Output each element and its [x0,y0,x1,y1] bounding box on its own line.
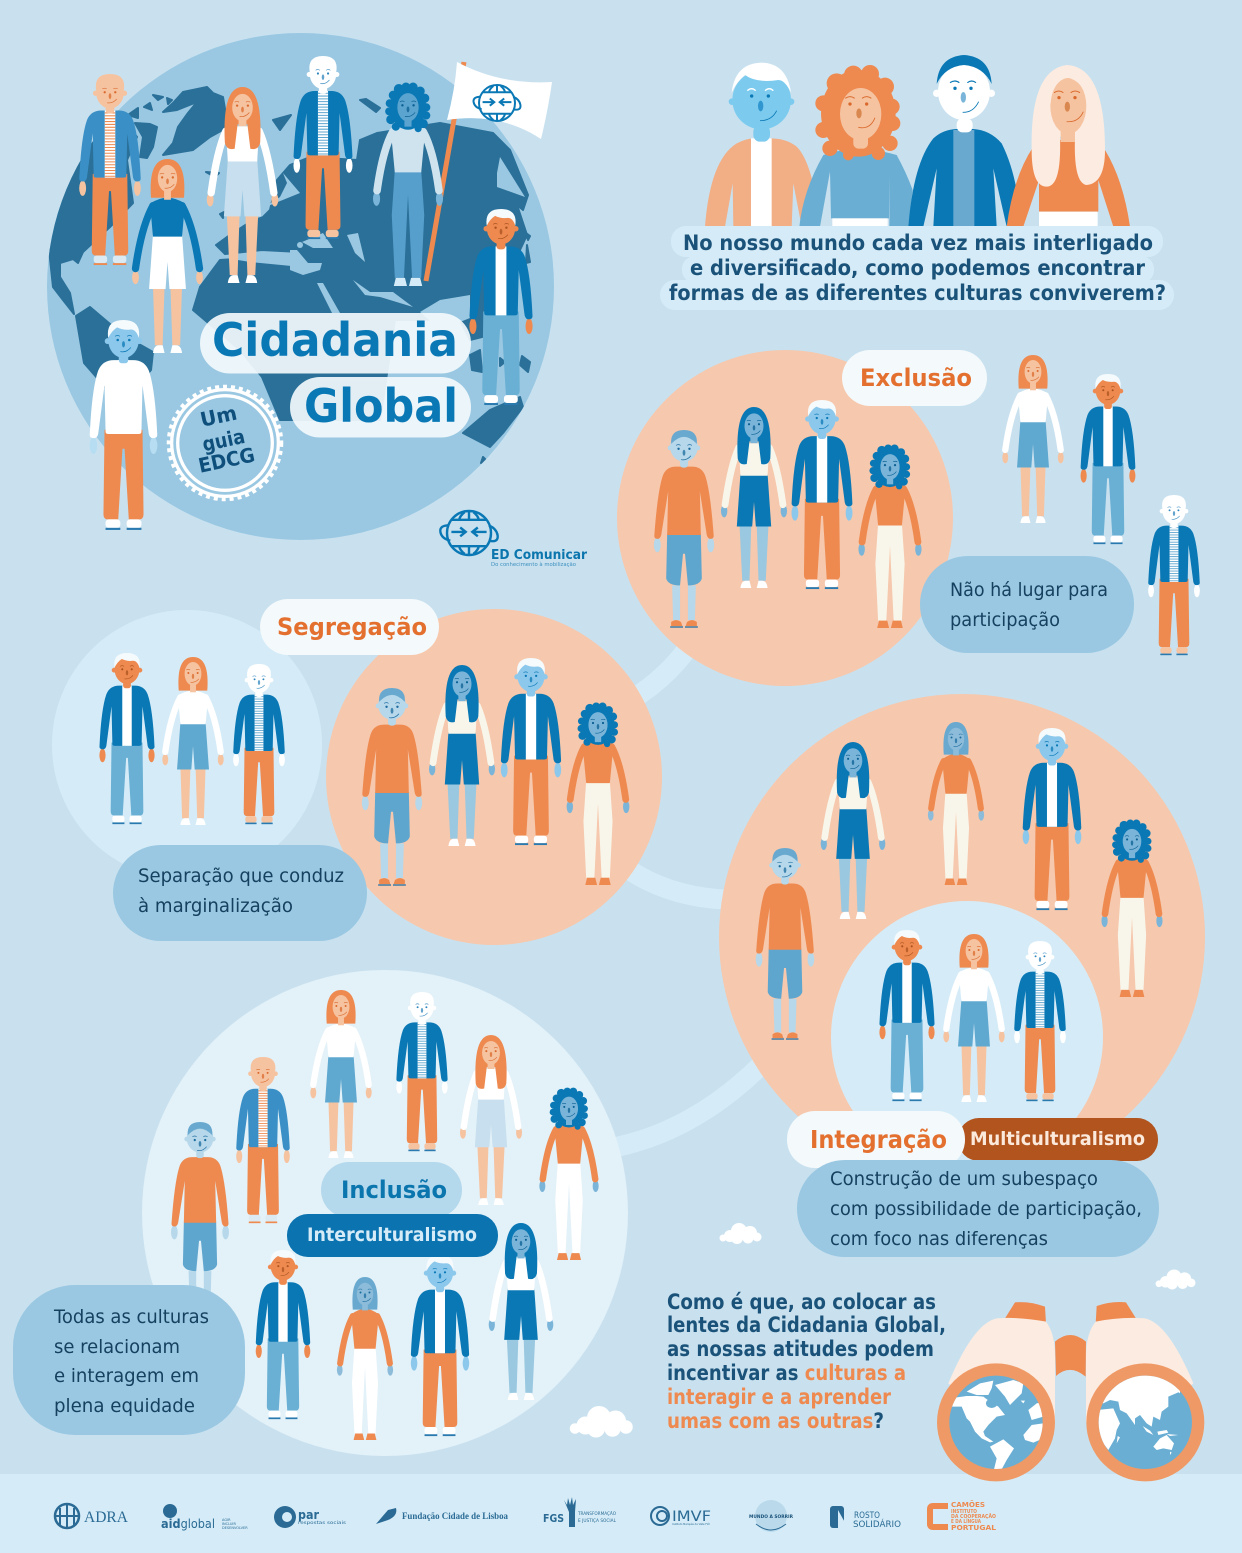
logo: FGS [543,1497,617,1527]
question text [660,226,1174,310]
label: Interculturalismo: Interculturalismo [307,1224,477,1246]
heading: Integração [787,1111,965,1168]
logo: FGS: FGS [543,1512,564,1525]
logo: Fundação Cidade de Lisboa: Fundação Cidade de Lisboa [402,1512,508,1522]
logo: aidglobal: DESENVOLVER [222,1526,248,1530]
panel: Segregação [52,599,662,945]
title: Global: Global [304,379,458,433]
badge: Um guia EDCG: EDCG [196,442,257,478]
closing question text: interagir e a aprender [667,1385,892,1409]
heading: Integração: Integração [810,1125,947,1154]
figure: bald man in blue jacket [396,992,448,1151]
heading: Inclusão [321,1162,462,1218]
flag [426,62,552,281]
figure: woman in small circle [162,657,224,825]
figure: woman in wide trousers [337,1277,393,1440]
figure: man at right [469,209,533,405]
figure: man [501,658,561,845]
logo: ED Comunicar: ED Comunicar [491,548,588,563]
logo: IMVF [651,1507,711,1526]
label: Multiculturalismo [958,1118,1158,1161]
badge: Um guia EDCG: Um [198,401,239,432]
figure: long-haired woman [821,742,885,919]
hero globe with people and title [47,33,554,540]
closing question text: umas com as outras? [667,1409,884,1433]
label: Multiculturalismo: Multiculturalismo [970,1128,1145,1150]
callout: Todas as culturas: Todas as culturas [53,1306,209,1328]
heading: Segregação [260,599,439,655]
logo: Camões: INSTITUTO [951,1509,977,1515]
logo: Camões [930,1500,997,1532]
logo: Fundação Cidade de Lisboa [376,1508,508,1524]
logo: FGS: TRANSFORMAÇÃO [577,1511,616,1516]
figure: man in subspace [879,930,935,1101]
logo: aidglobal: AGIR [222,1518,231,1522]
question text: No nosso mundo cada vez mais interligado [683,231,1153,256]
callout: Todas as culturas: e interagem em [54,1365,199,1387]
figure: man in small circle [99,653,155,824]
figure: man in white sweater [90,320,157,530]
figure: woman with bob [132,159,203,353]
figure: long-haired woman in blue shorts [489,1223,553,1400]
closing question text: incentivar as culturas a [667,1361,906,1385]
figure: bald man in small circle [233,664,285,824]
logo: par: par [298,1508,319,1522]
closing question text: lentes da Cidadania Global, [667,1313,946,1337]
illustration: four people busts [705,55,1130,227]
logo: IMVF: IMVF [672,1509,711,1525]
panel: Exclusão [617,350,1200,686]
question text: formas de as diferentes culturas conviverem? [669,281,1166,306]
logo: Rosto Solidário: ROSTO [854,1511,880,1521]
figure: bald man in blue jacket [293,56,353,239]
figure: woman in wide trousers [928,722,984,885]
label: Interculturalismo [287,1214,498,1257]
figure: woman with long hair [207,87,278,283]
figure: boy [362,688,422,886]
figure: man outside circle [1081,374,1135,544]
footer logos [55,1497,997,1532]
figure: boy [654,430,714,628]
title: Cidadania: Cidadania [212,313,458,367]
logo: ADRA [55,1504,128,1528]
figure: long-haired woman [429,665,495,846]
closing question text [667,1290,946,1433]
figure: woman with bob [310,990,372,1158]
callout: Não há lugar para participação: participação [950,609,1060,631]
figure: long-haired woman [721,407,787,588]
logo: IMVF: Instituto Marquês de Valle Flôr [672,1522,711,1526]
callout: Construção de um subespaço [797,1160,1159,1257]
closing question text: Como é que, ao colocar as [667,1290,936,1314]
logo: ED Comunicar [440,511,588,568]
figure: curly-haired woman [567,703,629,885]
callout: Não há lugar para participação: Não há lugar para [950,579,1108,601]
callout: Todas as culturas [13,1285,245,1435]
logo: Camões: E DA LÍNGUA [951,1517,981,1525]
badge: Um guia EDCG [168,386,282,500]
figure: curly-haired woman [539,1088,599,1260]
icon: cloud [720,1223,762,1244]
figure: man [1023,728,1081,910]
callout: Separação que conduz à marginalização [113,845,367,941]
heading: Segregação: Segregação [277,613,427,641]
callout: Construção de um subespaço: Construção de um subespaço [830,1168,1098,1190]
figure: bald man outside circle [1148,495,1200,655]
logo: aidglobal [161,1504,248,1531]
heading: Exclusão [842,350,987,406]
callout: Construção de um subespaço: com possibilidade de participação, [830,1198,1142,1220]
callout: Separação que conduz à marginalização: Separação que conduz [138,865,344,887]
figure: bald man [79,74,141,265]
figure: boy [756,848,814,1040]
figure: woman in subspace [943,934,1005,1102]
icon: cloud small [1156,1270,1195,1289]
figure: woman outside circle [1002,355,1064,523]
callout: Todas as culturas: se relacionam [54,1336,180,1358]
icon: cloud bottom [570,1406,633,1438]
connecting arcs [600,630,780,1150]
logo: Rosto Solidário: SOLIDÁRIO [853,1518,901,1530]
illustration: binoculars with world map lenses [937,1302,1204,1481]
heading: Inclusão: Inclusão [341,1176,447,1204]
callout: Todas as culturas: plena equidade [54,1395,195,1417]
logo: ED Comunicar: Do conhecimento à mobilização [491,561,577,568]
callout: Não há lugar para participação [920,556,1134,653]
figure: man [792,400,852,589]
footer band [0,1474,1242,1553]
panel: Integração [719,694,1205,1257]
logo: Rosto Solidário [830,1506,901,1530]
figure: curly-haired woman [858,445,922,628]
figure: boy [171,1122,229,1312]
question text: e diversificado, como podemos encontrar [690,256,1145,281]
callout: Construção de um subespaço: com foco nas diferenças [830,1228,1048,1250]
heading: Exclusão: Exclusão [860,364,972,392]
logo: Camões: PORTUGAL [951,1524,997,1532]
callout: Separação que conduz à marginalização: à marginalização [138,895,293,917]
figure: man [256,1250,310,1419]
panel: Inclusão [13,970,628,1456]
logo: Mundo a Sorrir [749,1500,794,1532]
figure: curly-haired woman holding flag [373,82,443,286]
logo: ADRA: ADRA [84,1509,128,1526]
logo: par: respostas sociais [298,1520,347,1526]
logo: aidglobal: aidglobal [161,1517,215,1531]
figure: bald man in subspace [1014,941,1066,1101]
logo: Camões: DA COOPERAÇÃO [951,1513,996,1520]
figure: curly-haired woman [1101,820,1163,997]
logo: aidglobal: INCLUIR [222,1522,236,1526]
closing question text: as nossas atitudes podem [667,1337,934,1361]
logo: Camões: CAMÕES [951,1500,985,1509]
logo: Mundo a Sorrir: MUNDO A SORRIR [749,1514,794,1520]
badge: Um guia EDCG: guia [200,424,247,456]
figure: long-haired woman [460,1035,522,1205]
logo: FGS: E JUSTIÇA SOCIAL [578,1518,617,1523]
figure: bald man [236,1057,290,1223]
figure: man with white hair [411,1255,469,1436]
world map [48,87,530,463]
logo: par [274,1506,347,1528]
